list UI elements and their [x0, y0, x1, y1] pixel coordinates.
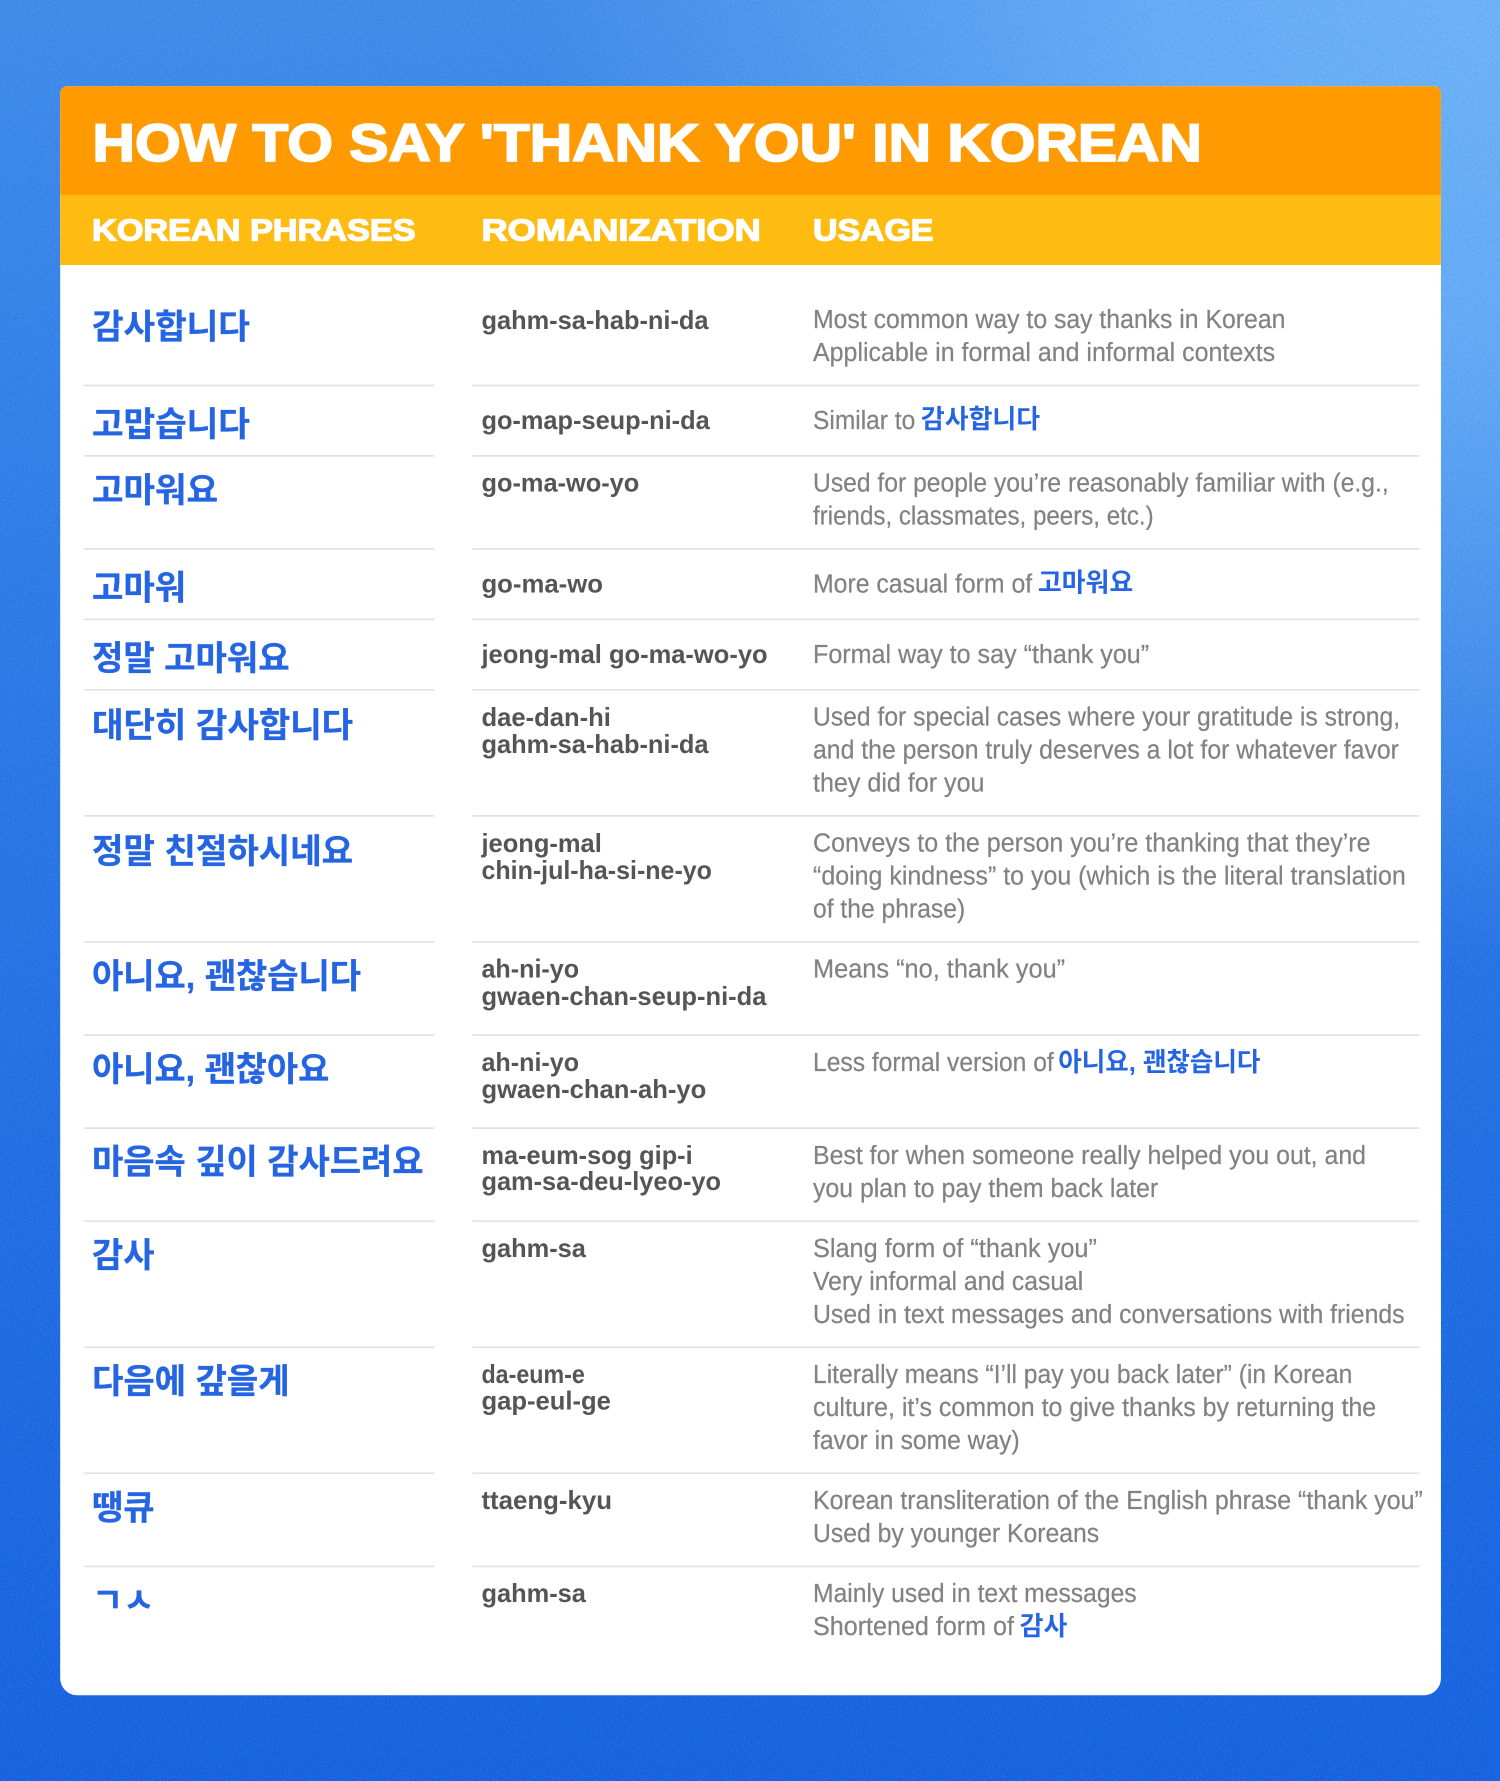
usage: More casual form of [813, 568, 1033, 598]
romanization: gwaen-chan-seup-ni-da [481, 983, 767, 1011]
row 10 [92, 1140, 1366, 1203]
usage: Used by younger Koreans [813, 1518, 1099, 1548]
phrase: 정말 고마워요 [92, 640, 290, 678]
romanization: gam-sa-deu-lyeo-yo [481, 1168, 721, 1196]
usage [813, 1140, 1366, 1203]
romanization: go-ma-wo [481, 570, 603, 598]
usage [813, 1485, 1423, 1548]
phrase: 마음속 깊이 감사드려요 [92, 1144, 424, 1182]
title band [60, 86, 1441, 195]
usage: 아니요, 괜찮습니다 [1058, 1047, 1260, 1077]
row 5 [92, 639, 1149, 678]
usage: Used in text messages and conversations with friends [813, 1299, 1405, 1329]
romanization: go-map-seup-ni-da [481, 407, 710, 435]
usage [813, 828, 1406, 923]
phrase: 고마워요 [92, 472, 218, 510]
phrase: 감사 [92, 1237, 154, 1275]
usage [813, 702, 1400, 797]
phrase: 감사합니다 [92, 308, 250, 346]
usage: Less formal version of [813, 1047, 1054, 1077]
usage [813, 468, 1389, 531]
phrase: 땡큐 [92, 1489, 154, 1527]
romanization: ma-eum-sog gip-i [481, 1142, 693, 1170]
usage: Similar to [813, 405, 915, 435]
usage: 감사 [1020, 1611, 1067, 1641]
usage: Literally means “I’ll pay you back later” (in Korean [813, 1359, 1352, 1389]
usage: Mainly used in text messages [813, 1578, 1137, 1608]
usage: Most common way to say thanks in Korean [813, 304, 1285, 334]
usage [813, 1359, 1376, 1455]
usage: Applicable in formal and informal contexts [813, 337, 1275, 367]
romanization: gahm-sa-hab-ni-da [481, 307, 709, 335]
usage: Formal way to say “thank you” [813, 639, 1149, 669]
phrase: 아니요, 괜찮습니다 [92, 958, 361, 996]
romanization: gwaen-chan-ah-yo [481, 1076, 706, 1104]
usage: 감사합니다 [921, 404, 1040, 434]
phrase: 고맙습니다 [92, 406, 250, 444]
romanization: jeong-mal [480, 830, 602, 858]
usage: they did for you [813, 767, 984, 797]
usage [813, 1233, 1405, 1329]
usage: Used for special cases where your gratitude is strong, [813, 702, 1400, 732]
romanization: da-eum-e [481, 1361, 585, 1389]
row 4 [92, 568, 1133, 608]
row 6 [92, 702, 1400, 797]
romanization: jeong-mal go-ma-wo-yo [480, 641, 768, 669]
romanization: ttaeng-kyu [481, 1487, 612, 1515]
usage: you plan to pay them back later [813, 1173, 1158, 1203]
usage: of the phrase) [813, 893, 965, 923]
phrase: 다음에 갚을게 [92, 1363, 290, 1401]
romanization [481, 1142, 721, 1196]
heading: romanization: ROMANIZATION [481, 214, 761, 247]
romanization: gahm-sa [481, 1580, 587, 1608]
usage: culture, it’s common to give thanks by returning the [813, 1392, 1376, 1422]
usage: Conveys to the person you’re thanking that they’re [813, 828, 1371, 858]
usage: and the person truly deserves a lot for whatever favor [813, 735, 1399, 765]
usage: Slang form of “thank you” [813, 1233, 1097, 1263]
row 13 [92, 1485, 1423, 1548]
phrase: 고마워 [92, 570, 186, 608]
romanization [481, 1049, 706, 1104]
usage [813, 404, 1040, 435]
romanization [481, 956, 767, 1011]
usage: friends, classmates, peers, etc.) [813, 501, 1154, 531]
column header band [60, 195, 1441, 265]
usage: favor in some way) [813, 1425, 1020, 1455]
phrase: 대단히 감사합니다 [92, 707, 353, 745]
usage: 고마워요 [1038, 568, 1133, 598]
usage: Means “no, thank you” [813, 954, 1065, 984]
romanization [481, 704, 709, 759]
romanization: gahm-sa [481, 1235, 587, 1263]
row 7 [92, 828, 1406, 923]
phrase: 정말 친절하시네요 [92, 833, 353, 871]
usage: Used for people you’re reasonably familiar with (e.g., [813, 468, 1389, 498]
title: HOW TO SAY 'THANK YOU' IN KOREAN [93, 114, 1202, 173]
romanization [480, 830, 712, 885]
usage: Shortened form of [813, 1611, 1015, 1641]
usage: Korean transliteration of the English phrase “thank you” [813, 1485, 1423, 1515]
phrase: ㄱㅅ [92, 1582, 154, 1620]
row 2 [92, 404, 1040, 444]
row 8 [92, 954, 1065, 1011]
row 12 [92, 1359, 1376, 1455]
usage: “doing kindness” to you (which is the literal translation [813, 861, 1406, 891]
romanization [481, 1361, 611, 1416]
usage [813, 304, 1285, 367]
usage [813, 1578, 1137, 1641]
romanization: ah-ni-yo [481, 1049, 579, 1077]
row 11 [92, 1233, 1405, 1329]
row 1 [92, 304, 1285, 367]
usage: Very informal and casual [813, 1266, 1083, 1296]
row 14 [92, 1578, 1137, 1641]
romanization: go-ma-wo-yo [481, 470, 639, 498]
usage [813, 1047, 1260, 1077]
phrase: 아니요, 괜찮아요 [92, 1051, 329, 1089]
usage: Best for when someone really helped you out, and [813, 1140, 1366, 1170]
heading: korean phrases: KOREAN PHRASES [92, 214, 416, 247]
romanization: gap-eul-ge [481, 1388, 611, 1416]
heading: usage: USAGE [813, 214, 933, 247]
romanization: chin-jul-ha-si-ne-yo [481, 857, 712, 885]
romanization: dae-dan-hi [481, 704, 611, 732]
row 3 [92, 468, 1389, 531]
row 9 [92, 1047, 1260, 1104]
romanization: ah-ni-yo [481, 956, 579, 984]
romanization: gahm-sa-hab-ni-da [481, 731, 709, 759]
